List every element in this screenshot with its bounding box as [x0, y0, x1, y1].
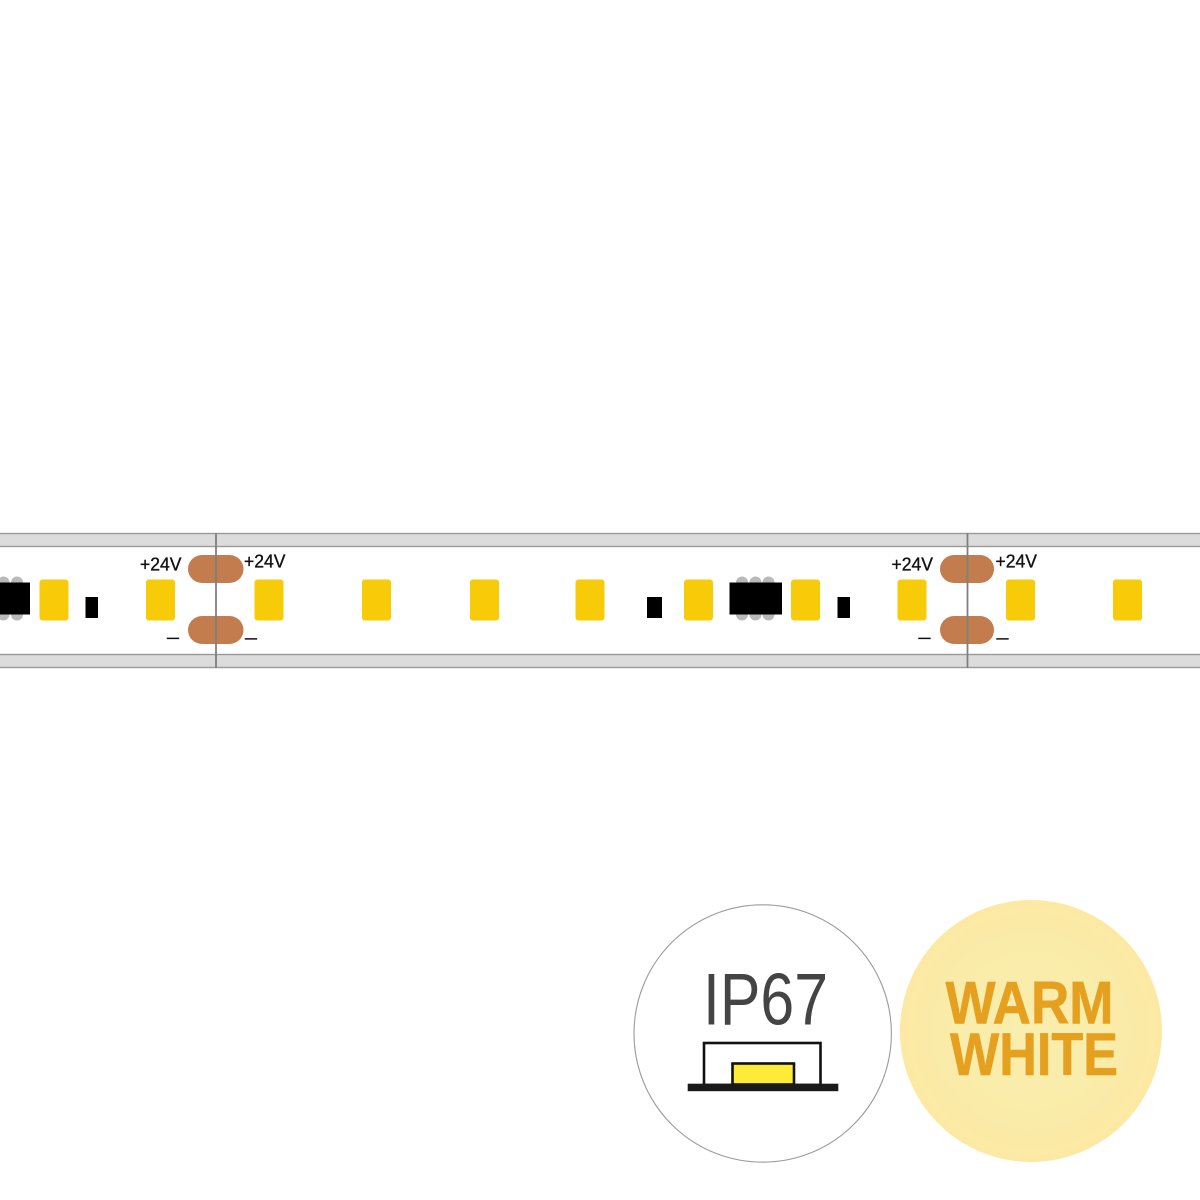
- IP67 label: IP67: [703, 960, 828, 1040]
- polarity labels: –: [167, 627, 179, 647]
- badge disc: [900, 900, 1162, 1162]
- cut lines: [216, 533, 968, 668]
- polarity labels: [140, 550, 1038, 648]
- polarity labels: +24V: [996, 550, 1038, 572]
- polarity labels: +24V: [140, 554, 182, 574]
- WHITE label: WHITE: [950, 1021, 1118, 1088]
- polarity labels: –: [996, 628, 1008, 648]
- polarity labels: +24V: [892, 554, 934, 574]
- badge outline: [634, 905, 891, 1162]
- copper solder pads: [188, 555, 994, 644]
- WARM label: WARM: [946, 969, 1114, 1036]
- polarity labels: –: [245, 628, 257, 648]
- strip top edge band: [0, 534, 1200, 546]
- LED strip: [0, 533, 1200, 668]
- small black resistors: [86, 597, 850, 618]
- badge: IP67: [634, 905, 891, 1162]
- IC chip pins: [0, 576, 774, 620]
- polarity labels: +24V: [244, 550, 286, 572]
- polarity labels: –: [918, 627, 930, 647]
- IC chips: [0, 582, 782, 614]
- strip bottom edge band: [0, 654, 1200, 668]
- yellow LED chips: [40, 580, 1142, 620]
- badge: warm white: [900, 900, 1162, 1162]
- icon: encapsulated LED: [688, 1043, 838, 1091]
